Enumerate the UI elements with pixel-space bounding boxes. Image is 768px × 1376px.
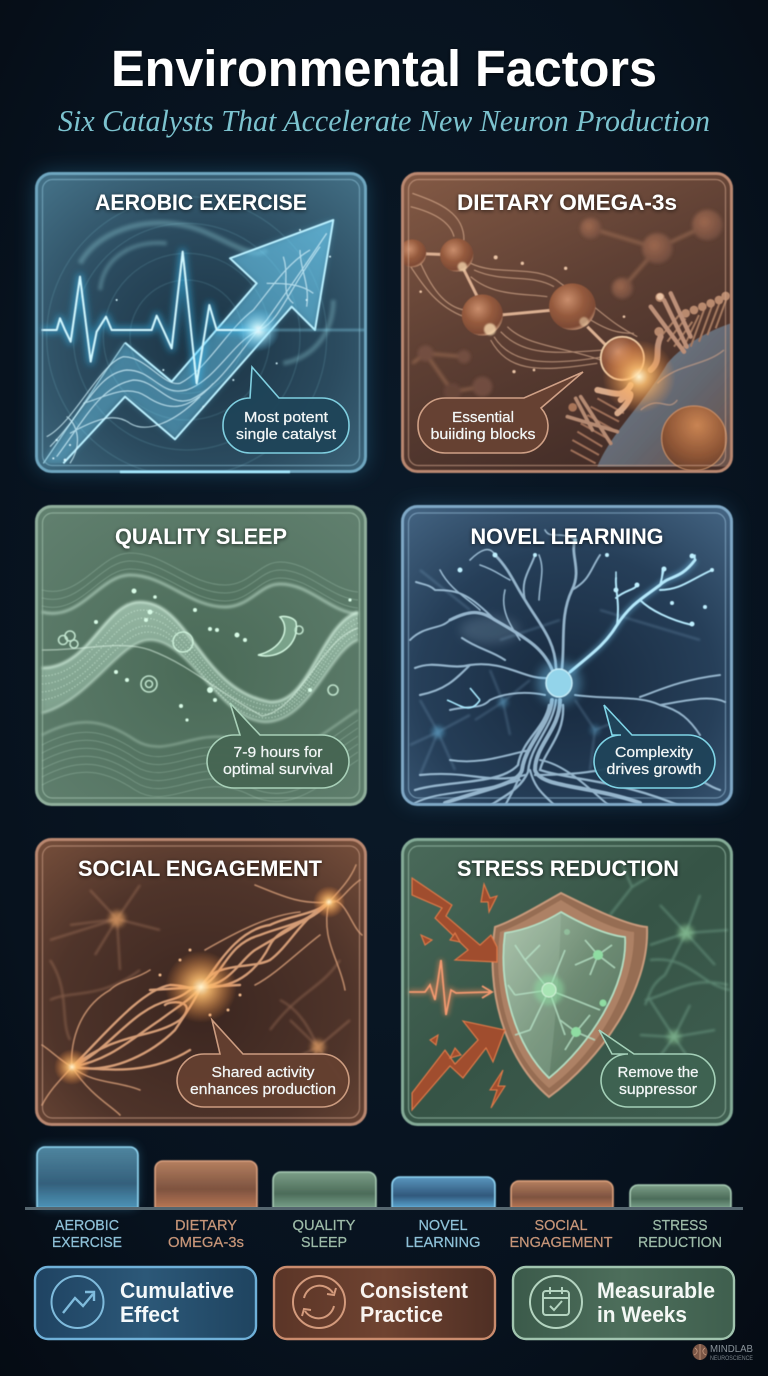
card text: Effect	[120, 1302, 180, 1327]
callout: complexity: drives growth	[606, 761, 702, 778]
callout: shared activity: Shared activity	[212, 1064, 315, 1081]
heading: quality sleep: QUALITY SLEEP	[115, 524, 287, 549]
bar: novel learning	[392, 1177, 495, 1208]
callout: most potent	[223, 367, 349, 453]
callout: building blocks: Essential	[452, 409, 514, 426]
panel border: aerobic	[36, 174, 366, 472]
artwork: pulse line becoming rising arrow	[42, 197, 367, 477]
title: Environmental Factors	[111, 40, 657, 97]
bar: dietary omega-3s	[155, 1161, 257, 1208]
panel frame: learning	[401, 505, 733, 806]
panel border: sleep	[36, 506, 366, 804]
callout: shared activity	[177, 1020, 349, 1107]
callout: complexity	[594, 705, 715, 788]
shield	[492, 893, 647, 1097]
panel frame: aerobic	[35, 172, 367, 473]
heading: dietary omega-3s: DIETARY OMEGA-3s	[457, 190, 677, 215]
artwork: sleep waves and cellular particles	[42, 553, 358, 802]
panel border: learning	[402, 506, 732, 804]
bar: stress reduction	[630, 1185, 731, 1208]
strands	[411, 193, 637, 368]
panel frame: stress	[402, 839, 732, 1124]
icon: trend arrow	[52, 1276, 104, 1328]
icon: cycle arrows	[293, 1276, 345, 1328]
label: dietary omega-3s: OMEGA-3s	[168, 1234, 244, 1251]
label: quality sleep: QUALITY	[292, 1217, 356, 1234]
bolts	[412, 878, 505, 1110]
label: stress reduction: REDUCTION	[638, 1234, 722, 1251]
panel: novel learning	[401, 505, 733, 806]
callout: 7-9 hours: 7-9 hours for	[234, 744, 322, 761]
label: dietary omega-3s: DIETARY	[175, 1217, 237, 1234]
artwork: branching neuron tree	[410, 530, 725, 806]
label: social engagement: SOCIAL	[534, 1217, 588, 1234]
panel border: stress	[402, 840, 732, 1124]
label: novel learning: LEARNING	[406, 1234, 480, 1251]
bar labels	[52, 1217, 722, 1251]
artwork: interwoven neural strands	[42, 865, 362, 1115]
label: aerobic exercise: EXERCISE	[52, 1234, 122, 1251]
callout: remove the suppressor	[599, 1030, 715, 1107]
icon: calendar check	[530, 1276, 582, 1328]
callout: 7-9 hours	[207, 703, 349, 788]
callout: most potent: single catalyst	[236, 426, 337, 443]
panel frame: social	[36, 839, 366, 1124]
logo: mindlab neuroscience: MINDLAB	[710, 1344, 753, 1355]
artwork: shield deflecting stress bolts	[409, 860, 730, 1110]
logo: mindlab neuroscience: NEUROSCIENCE	[710, 1356, 753, 1362]
heading: social engagement: SOCIAL ENGAGEMENT	[78, 856, 323, 881]
icon: brain	[692, 1344, 708, 1360]
cell body	[597, 323, 731, 467]
heading: novel learning: NOVEL LEARNING	[470, 524, 664, 549]
panel frame: sleep	[36, 506, 366, 805]
subtitle: Six Catalysts That Accelerate New Neuron Production	[58, 103, 710, 138]
panel frame: omega	[402, 173, 732, 472]
heading: aerobic exercise: AEROBIC EXERCISE	[95, 190, 307, 215]
callout: remove the suppressor: suppressor	[619, 1081, 697, 1098]
bar: social engagement	[511, 1181, 613, 1208]
label: stress reduction: STRESS	[652, 1217, 708, 1234]
callout: building blocks: buiiding blocks	[430, 426, 536, 443]
card: consistent practice	[274, 1267, 495, 1339]
panel: aerobic exercise	[35, 172, 367, 477]
label: social engagement: ENGAGEMENT	[510, 1234, 612, 1251]
callout: most potent: Most potent	[244, 409, 329, 426]
label: novel learning: NOVEL	[418, 1217, 468, 1234]
panel: dietary omega-3s	[398, 173, 732, 472]
panel: social engagement	[36, 839, 366, 1124]
card text: Measurable	[597, 1278, 715, 1303]
particles	[58, 626, 338, 695]
card text: Practice	[360, 1302, 443, 1327]
callout: remove the suppressor: Remove the	[618, 1064, 698, 1081]
callout: shared activity: enhances production	[190, 1081, 336, 1098]
card: cumulative effect	[35, 1267, 256, 1339]
card text: in Weeks	[597, 1302, 687, 1327]
callout: complexity: Complexity	[615, 744, 694, 761]
heading: stress reduction: STRESS REDUCTION	[457, 856, 679, 881]
bar: aerobic exercise	[37, 1147, 138, 1208]
panel: stress reduction	[402, 839, 732, 1124]
bar chart: relative catalyst strength	[25, 1146, 743, 1210]
panel: quality sleep	[36, 506, 366, 805]
bar: quality sleep	[273, 1172, 376, 1208]
axis line	[25, 1207, 743, 1210]
membrane combs	[661, 297, 727, 350]
callout: building blocks	[418, 372, 583, 453]
card text: Cumulative	[120, 1278, 234, 1303]
card text: Consistent	[360, 1278, 469, 1303]
label: aerobic exercise: AEROBIC	[55, 1217, 119, 1234]
artwork: molecules docking with cell membrane	[398, 193, 731, 471]
panel border: social	[36, 840, 366, 1124]
callout: 7-9 hours: optimal survival	[223, 761, 333, 778]
card: measurable in weeks	[513, 1267, 734, 1339]
logo: mindlab neuroscience	[692, 1344, 753, 1362]
label: quality sleep: SLEEP	[301, 1234, 347, 1251]
panel border: omega	[402, 174, 732, 472]
